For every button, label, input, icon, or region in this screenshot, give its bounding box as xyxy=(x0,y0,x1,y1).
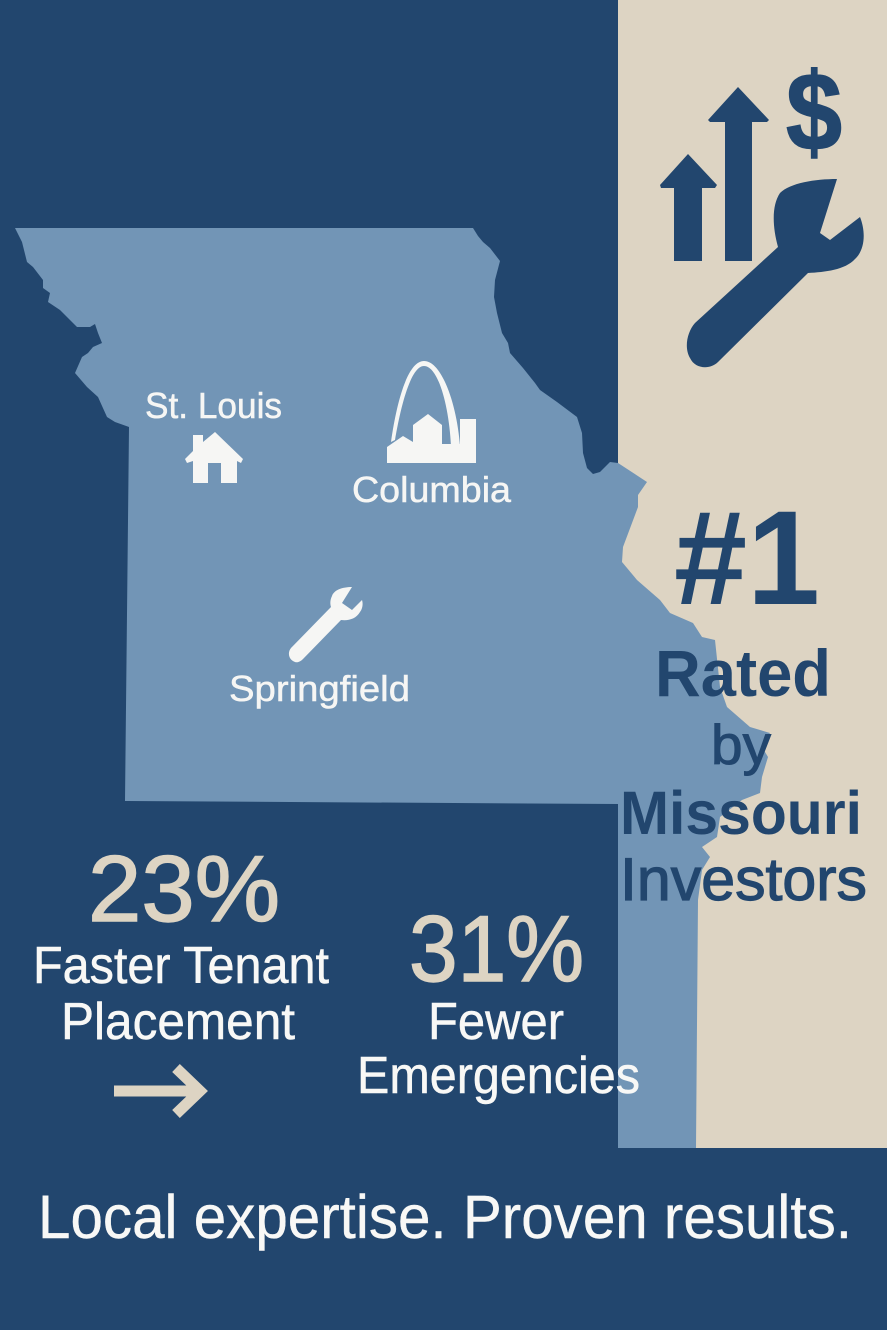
text: Faster Tenant: Faster Tenant xyxy=(33,937,330,995)
number: 31%: 31% xyxy=(409,896,584,1001)
text: Fewer: Fewer xyxy=(428,993,564,1051)
arrow: right arrow xyxy=(114,1068,200,1114)
icon: small up arrow xyxy=(660,154,717,261)
text: Rated: Rated xyxy=(655,636,831,710)
stat: 23% faster tenant placement xyxy=(33,836,330,1051)
label: St. Louis: St. Louis xyxy=(145,385,282,426)
icon: large up arrow xyxy=(708,87,769,261)
icon: large wrench xyxy=(687,179,864,367)
label: Springfield: Springfield xyxy=(229,668,410,709)
panel: beige side panel xyxy=(618,0,887,1148)
callout: #1 rated xyxy=(620,484,867,913)
stat: #1: #1 xyxy=(674,484,820,633)
map: Missouri state shape xyxy=(15,228,770,1148)
icon: dollar sign: $ xyxy=(786,51,842,174)
text: Emergencies: Emergencies xyxy=(357,1047,640,1105)
label: Columbia: Columbia xyxy=(352,469,512,510)
icon: Gateway Arch and skyline xyxy=(387,361,476,463)
icon: small wrench xyxy=(289,587,363,662)
text: Investors: Investors xyxy=(620,846,867,913)
footer tagline: Local expertise. Proven results. xyxy=(38,1183,852,1251)
icon: skyline xyxy=(387,414,476,463)
icon: house xyxy=(185,432,243,483)
text: Missouri: Missouri xyxy=(620,779,862,847)
icon: arch xyxy=(391,361,460,446)
text: Placement: Placement xyxy=(61,993,296,1051)
icon: growth arrows, dollar sign and wrench xyxy=(660,51,864,367)
stat: 31% fewer emergencies xyxy=(357,896,640,1105)
number: 23%: 23% xyxy=(88,836,280,941)
text: by: by xyxy=(711,713,771,776)
